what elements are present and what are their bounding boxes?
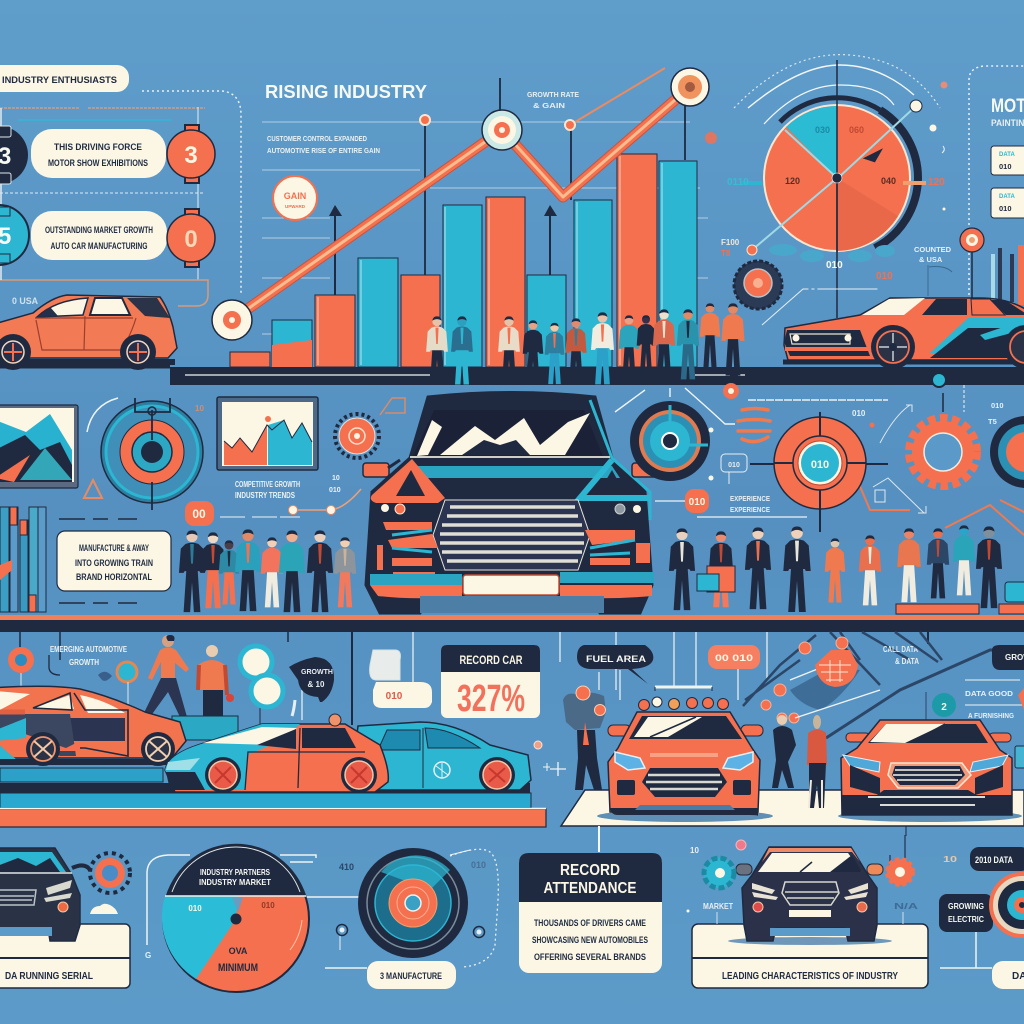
orange badge three (167, 124, 215, 184)
labels (339, 860, 486, 872)
chat icon (721, 454, 747, 484)
stacked icon (738, 408, 770, 442)
text pill two: OUTSTANDING MARKET GROWTH (45, 225, 153, 235)
windshield (413, 410, 603, 456)
orange badge three: 3 (184, 142, 198, 169)
chart grid (262, 122, 708, 334)
heading pill: INDUSTRY ENTHUSIASTS (2, 75, 117, 86)
small labels: MARKET (703, 902, 733, 911)
car: orange front one (597, 712, 773, 822)
platform label (692, 924, 928, 988)
spot arm (743, 632, 910, 706)
pie labels (785, 125, 896, 186)
dark tag top (970, 847, 1024, 871)
pie chart: MINIMUM (218, 962, 258, 974)
badge orange (98, 662, 137, 705)
label pill (367, 961, 456, 989)
top pin badge (932, 373, 946, 387)
stage teal (172, 716, 238, 740)
car: dark front (0, 848, 90, 941)
car: muscle coupe (783, 298, 1024, 369)
needles (747, 100, 922, 255)
decor dots (930, 82, 948, 210)
heading pill (0, 65, 129, 92)
platform label: DA RUNNING SERIAL (5, 971, 93, 982)
connector (288, 489, 361, 514)
callout: BRAND HORIZONTAL (76, 572, 152, 582)
top badge (723, 383, 739, 399)
ring diagram (630, 401, 710, 481)
callout: MANUFACTURE & AWAY (79, 543, 149, 553)
stat circle: GAIN (284, 191, 306, 201)
teal number badge (0, 205, 29, 265)
panel: middle right (615, 373, 1024, 614)
outer labels (721, 177, 952, 282)
shade (790, 668, 860, 710)
panel: bottom left (0, 844, 498, 992)
outer labels: 120 (928, 177, 945, 188)
small label: 010 (991, 401, 1004, 410)
badge small (8, 647, 34, 690)
outer labels: T8 (721, 249, 731, 258)
body text (532, 918, 648, 963)
show floor (561, 790, 1024, 826)
speech bubble: GROWTH (301, 669, 333, 676)
heading: RECORD (560, 862, 620, 879)
double circles (240, 646, 283, 725)
dark label: ELECTRIC (948, 915, 984, 924)
body text: OFFERING SEVERAL BRANDS (534, 952, 646, 963)
gear icon (734, 261, 782, 309)
standing person (198, 645, 234, 720)
small label: 10 (195, 404, 204, 413)
title: RISING INDUSTRY (265, 81, 428, 102)
small label: G (145, 951, 151, 960)
mini bars (991, 245, 1024, 305)
small labels (690, 846, 958, 911)
car: two-tone hatchback (165, 714, 388, 793)
caption: EXPERIENCE (730, 505, 770, 514)
info cards: 010 (999, 162, 1012, 171)
wheels (205, 757, 377, 793)
headlight trims (371, 459, 445, 503)
platform layers (0, 768, 531, 808)
gear icon (912, 393, 974, 483)
pie labels: 030 (815, 125, 830, 135)
pie labels: 040 (881, 176, 896, 186)
dark tag (992, 645, 1024, 670)
panel: gauge pie chart (721, 55, 952, 325)
orange target (750, 412, 910, 532)
body text: SHOWCASING NEW AUTOMOBILES (532, 935, 648, 946)
person orange (807, 715, 827, 808)
text pill two: AUTO CAR MANUFACTURING (50, 241, 148, 251)
info cards: DATA (999, 152, 1015, 158)
teal badge (926, 692, 956, 720)
outer labels: COUNTED (914, 245, 952, 254)
orange target: 010 (811, 459, 829, 471)
panel: record attendance: ATTENDANCE (544, 880, 636, 897)
pie chart: INDUSTRY MARKET (199, 877, 272, 887)
left bars (0, 507, 46, 612)
long diagonal arm (826, 650, 1024, 738)
body text: THOUSANDS OF DRIVERS CAME (534, 918, 646, 929)
trend node dots (212, 68, 709, 340)
panel: bottom right (686, 835, 1024, 989)
pin badge (960, 228, 984, 300)
partial ring (990, 416, 1024, 488)
arc arrow (87, 398, 118, 432)
car: orange SUV (0, 295, 177, 370)
orange cog (887, 835, 913, 885)
small label (988, 401, 1004, 426)
band middle (0, 615, 1024, 620)
small labels: & GAIN (533, 101, 565, 110)
pie chart: INDUSTRY PARTNERS (200, 867, 270, 877)
cloud (90, 904, 118, 914)
chart caption (267, 134, 380, 155)
podium (896, 582, 1024, 614)
monitor: line chart (217, 397, 318, 470)
walking person (142, 635, 189, 717)
orange tag: 010 (689, 497, 706, 508)
teal badge: 2 (941, 702, 947, 713)
caption: INDUSTRY TRENDS (235, 491, 296, 500)
small labels: 10 (690, 846, 699, 855)
mini list (965, 680, 1024, 720)
panel: industry enthusiasts (0, 65, 241, 306)
small labels: GROWTH RATE (527, 90, 579, 99)
panel: third row right (550, 632, 1024, 836)
pie labels: 060 (849, 125, 864, 135)
label pill: 3 MANUFACTURE (380, 971, 442, 982)
panel: middle left (0, 397, 405, 612)
dark number badge (0, 126, 28, 184)
caption: COMPETITIVE GROWTH (235, 480, 300, 489)
caption: EMERGING AUTOMOTIVE (50, 645, 128, 654)
orange badge zero (167, 208, 215, 268)
car: orange sedan (0, 686, 186, 766)
small labels (527, 90, 579, 110)
outer labels: 010 (876, 271, 893, 282)
text pill two (31, 211, 167, 260)
wheels (871, 325, 1024, 369)
chat icon: 010 (728, 462, 740, 469)
small icon (380, 398, 405, 415)
mirrors (363, 460, 657, 477)
stat circle (273, 176, 317, 220)
orange tag (655, 489, 709, 513)
pie labels: 120 (785, 176, 800, 186)
caption (235, 475, 341, 500)
orange badge zero: 0 (184, 226, 198, 253)
bubble cream: 010 (386, 691, 403, 702)
mini list: A FURNISHING (968, 711, 1014, 720)
sun gear (335, 414, 379, 458)
mini list: DATA GOOD (965, 689, 1014, 698)
small label: 0 USA (12, 296, 38, 306)
dark label (939, 894, 993, 932)
stat box: 327% (457, 678, 525, 720)
wheels (0, 334, 156, 370)
text pill one (31, 129, 166, 178)
license plate (463, 575, 559, 595)
wheel (479, 757, 515, 793)
small label (883, 645, 919, 666)
caption: EXPERIENCE (730, 494, 770, 503)
dark tag top: 2010 DATA (975, 855, 1013, 866)
small label: 010 (852, 409, 866, 418)
crowd: row two left (179, 529, 356, 612)
arrows (873, 405, 926, 513)
pie chart (162, 844, 309, 992)
bubble cream (370, 650, 432, 708)
arrow: up two (544, 205, 557, 275)
pins (336, 924, 484, 950)
monitor: mountains (0, 405, 78, 488)
small labels: N/A (894, 902, 918, 911)
car: teal sedan rear (350, 722, 531, 793)
dark label: GROWING (948, 902, 984, 911)
info cards: DATA (999, 194, 1015, 200)
speech bubble (289, 657, 334, 702)
panel: third row left (0, 632, 550, 827)
grille (433, 500, 590, 570)
text pill one: THIS DRIVING FORCE (54, 142, 142, 152)
road strip upper (170, 367, 1024, 385)
panel: rising industry chart (212, 68, 717, 367)
orange basket (815, 650, 858, 687)
person with balloon (563, 686, 606, 790)
person dark (772, 715, 796, 788)
small labels: 10 (943, 855, 958, 864)
orange tag (185, 501, 214, 526)
outer labels: & USA (919, 255, 943, 264)
outer labels: 010 (826, 260, 843, 271)
bumper accents (377, 522, 438, 576)
ring diagram (101, 398, 203, 510)
stat circle: UPWARD (285, 204, 306, 209)
info cards (991, 146, 1024, 218)
outer labels: F100 (721, 238, 740, 247)
spotlights (761, 637, 848, 723)
small label: T5 (988, 417, 997, 426)
crowd: row one (426, 303, 745, 385)
orange tag: 00 010 (715, 653, 753, 664)
ceiling lights (638, 687, 728, 710)
label pill right (992, 961, 1024, 989)
stat box: RECORD CAR (460, 653, 523, 667)
wheels (26, 732, 175, 766)
speech tag (577, 645, 653, 684)
triangle icon (84, 480, 102, 498)
caption: GROWTH (69, 658, 99, 667)
trend line (945, 500, 1024, 535)
platform label (0, 924, 130, 988)
small badge (1015, 746, 1024, 768)
teal cog (704, 858, 734, 888)
stat box (441, 645, 540, 720)
sun gear (90, 853, 130, 893)
callout (57, 531, 171, 591)
orange tag (708, 645, 760, 700)
pie chart: 010 (188, 904, 202, 913)
car: navy front (728, 847, 892, 945)
dark ring (780, 98, 880, 122)
labels: 410 (339, 862, 354, 872)
pie (764, 105, 910, 252)
vinyl ring chart (358, 848, 468, 958)
caption: 010 (329, 487, 341, 494)
orange tag: 00 (192, 507, 206, 521)
caption: 10 (332, 475, 340, 482)
small label: & DATA (895, 657, 919, 666)
orange platform (0, 809, 546, 827)
text pill one: MOTOR SHOW EXHIBITIONS (48, 158, 148, 168)
caption (50, 645, 128, 667)
chart caption: CUSTOMER CONTROL EXPANDED (267, 134, 367, 143)
speech tag: FUEL AREA (586, 654, 646, 665)
partial ring (991, 874, 1024, 936)
crowd: row two right (669, 525, 1002, 612)
caption (730, 494, 770, 514)
small label: CALL DATA (883, 645, 918, 654)
panel: record attendance (519, 826, 662, 973)
callout: INTO GROWING TRAIN (75, 558, 153, 568)
info cards: 010 (999, 204, 1012, 213)
pie chart: 010 (261, 901, 275, 910)
pie chart: OVA (229, 946, 248, 956)
arrow: up one (329, 205, 342, 295)
chart caption: AUTOMOTIVE RISE OF ENTIRE GAIN (267, 146, 380, 155)
car: central front view (363, 392, 657, 613)
outer labels: 0110 (727, 177, 749, 188)
car: orange front two (838, 720, 1022, 822)
platform label: LEADING CHARACTERISTICS OF INDUSTRY (722, 971, 898, 982)
trend line (232, 68, 690, 320)
speech bubble: & 10 (308, 680, 325, 689)
panel: motor top right (960, 66, 1024, 330)
labels: 010 (471, 860, 486, 870)
bar chart (230, 154, 697, 367)
